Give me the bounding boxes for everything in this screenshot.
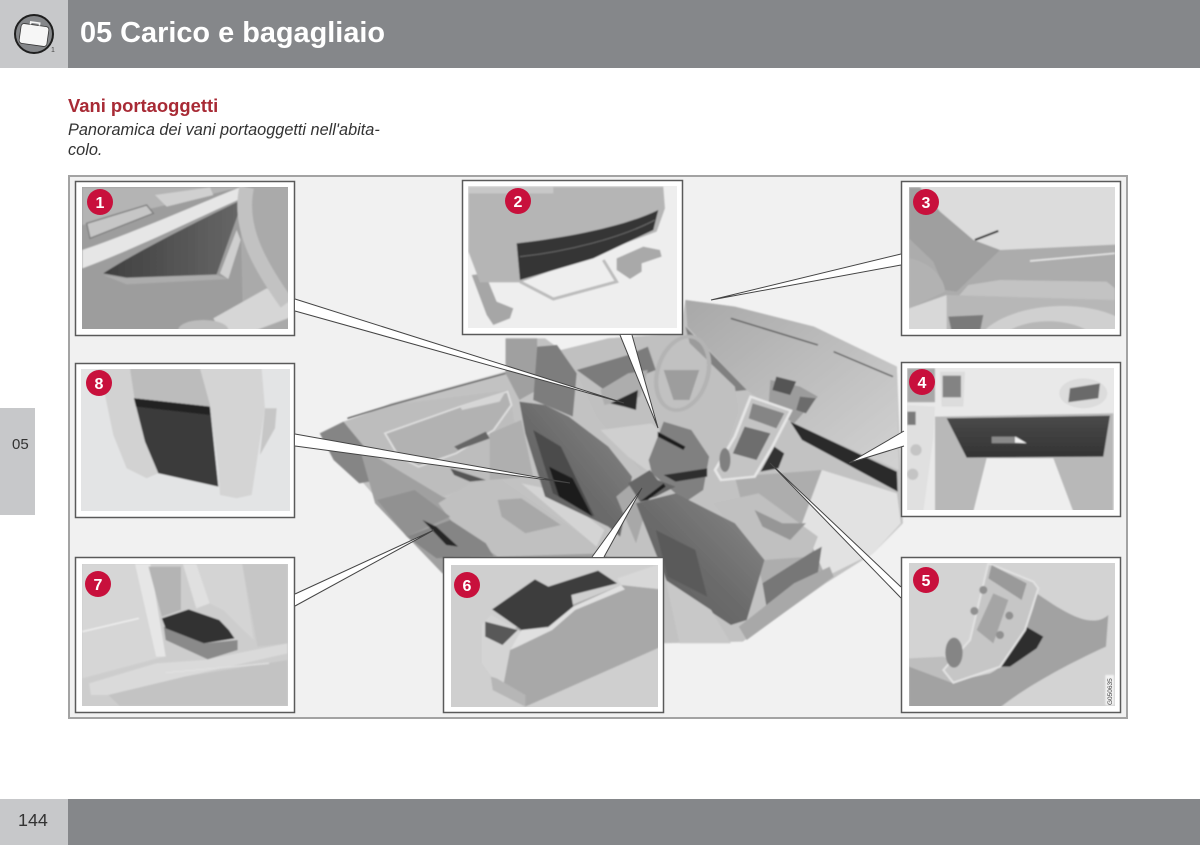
icon: suitcase [15, 15, 55, 54]
badge 6: 6 [463, 578, 472, 595]
badge 8 [86, 370, 112, 396]
leader line 6 [592, 488, 642, 557]
main diagram panel [69, 176, 1127, 718]
section heading: Vani portaoggetti [68, 95, 218, 116]
side tab: chapter 05 [0, 408, 35, 515]
intro text: colo. [68, 141, 102, 159]
page number: 144 [18, 810, 48, 830]
intro text: Panoramica dei vani portaoggetti nell'abita- [68, 121, 380, 139]
panel 7: rear armrest [76, 558, 294, 712]
badge 7 [85, 571, 111, 597]
badge 1 [87, 189, 113, 215]
leader line 8 [295, 434, 570, 483]
header bar [0, 0, 1200, 68]
badge 1: 1 [96, 195, 105, 212]
badge 4 [909, 369, 935, 395]
illustration: car interior overview [320, 300, 903, 643]
badge 3 [913, 189, 939, 215]
badge 6 [454, 572, 480, 598]
badge 7: 7 [94, 577, 103, 594]
panel 4: glove compartment [902, 362, 1120, 516]
icon: suitcase: 1 [51, 47, 55, 54]
part number: G050635 [1107, 678, 1114, 705]
panel 2: seat front drawer [462, 180, 682, 334]
leader line 4 [849, 431, 904, 463]
badge 5: 5 [922, 573, 931, 590]
leader line 3 [711, 254, 901, 300]
leader line 5 [770, 463, 901, 598]
panel 6: armrest console [444, 558, 664, 712]
panel 5: centre console tray [902, 558, 1120, 712]
chapter title: 05 Carico e bagagliaio [80, 17, 385, 49]
badge 3: 3 [922, 195, 931, 212]
leader line 7 [295, 530, 434, 606]
panel 3: dashboard top [902, 182, 1120, 336]
panel 1: door pocket [76, 182, 297, 340]
side tab: chapter 05: 05 [12, 436, 29, 453]
leader line 1 [295, 299, 624, 403]
badge 2: 2 [514, 194, 523, 211]
footer bar [0, 799, 1200, 845]
badge 5 [913, 567, 939, 593]
leader line 2 [620, 335, 658, 428]
panel 8: seat back pocket [76, 364, 294, 518]
badge 8: 8 [95, 376, 104, 393]
badge 4: 4 [918, 375, 927, 392]
badge 2 [505, 188, 531, 214]
